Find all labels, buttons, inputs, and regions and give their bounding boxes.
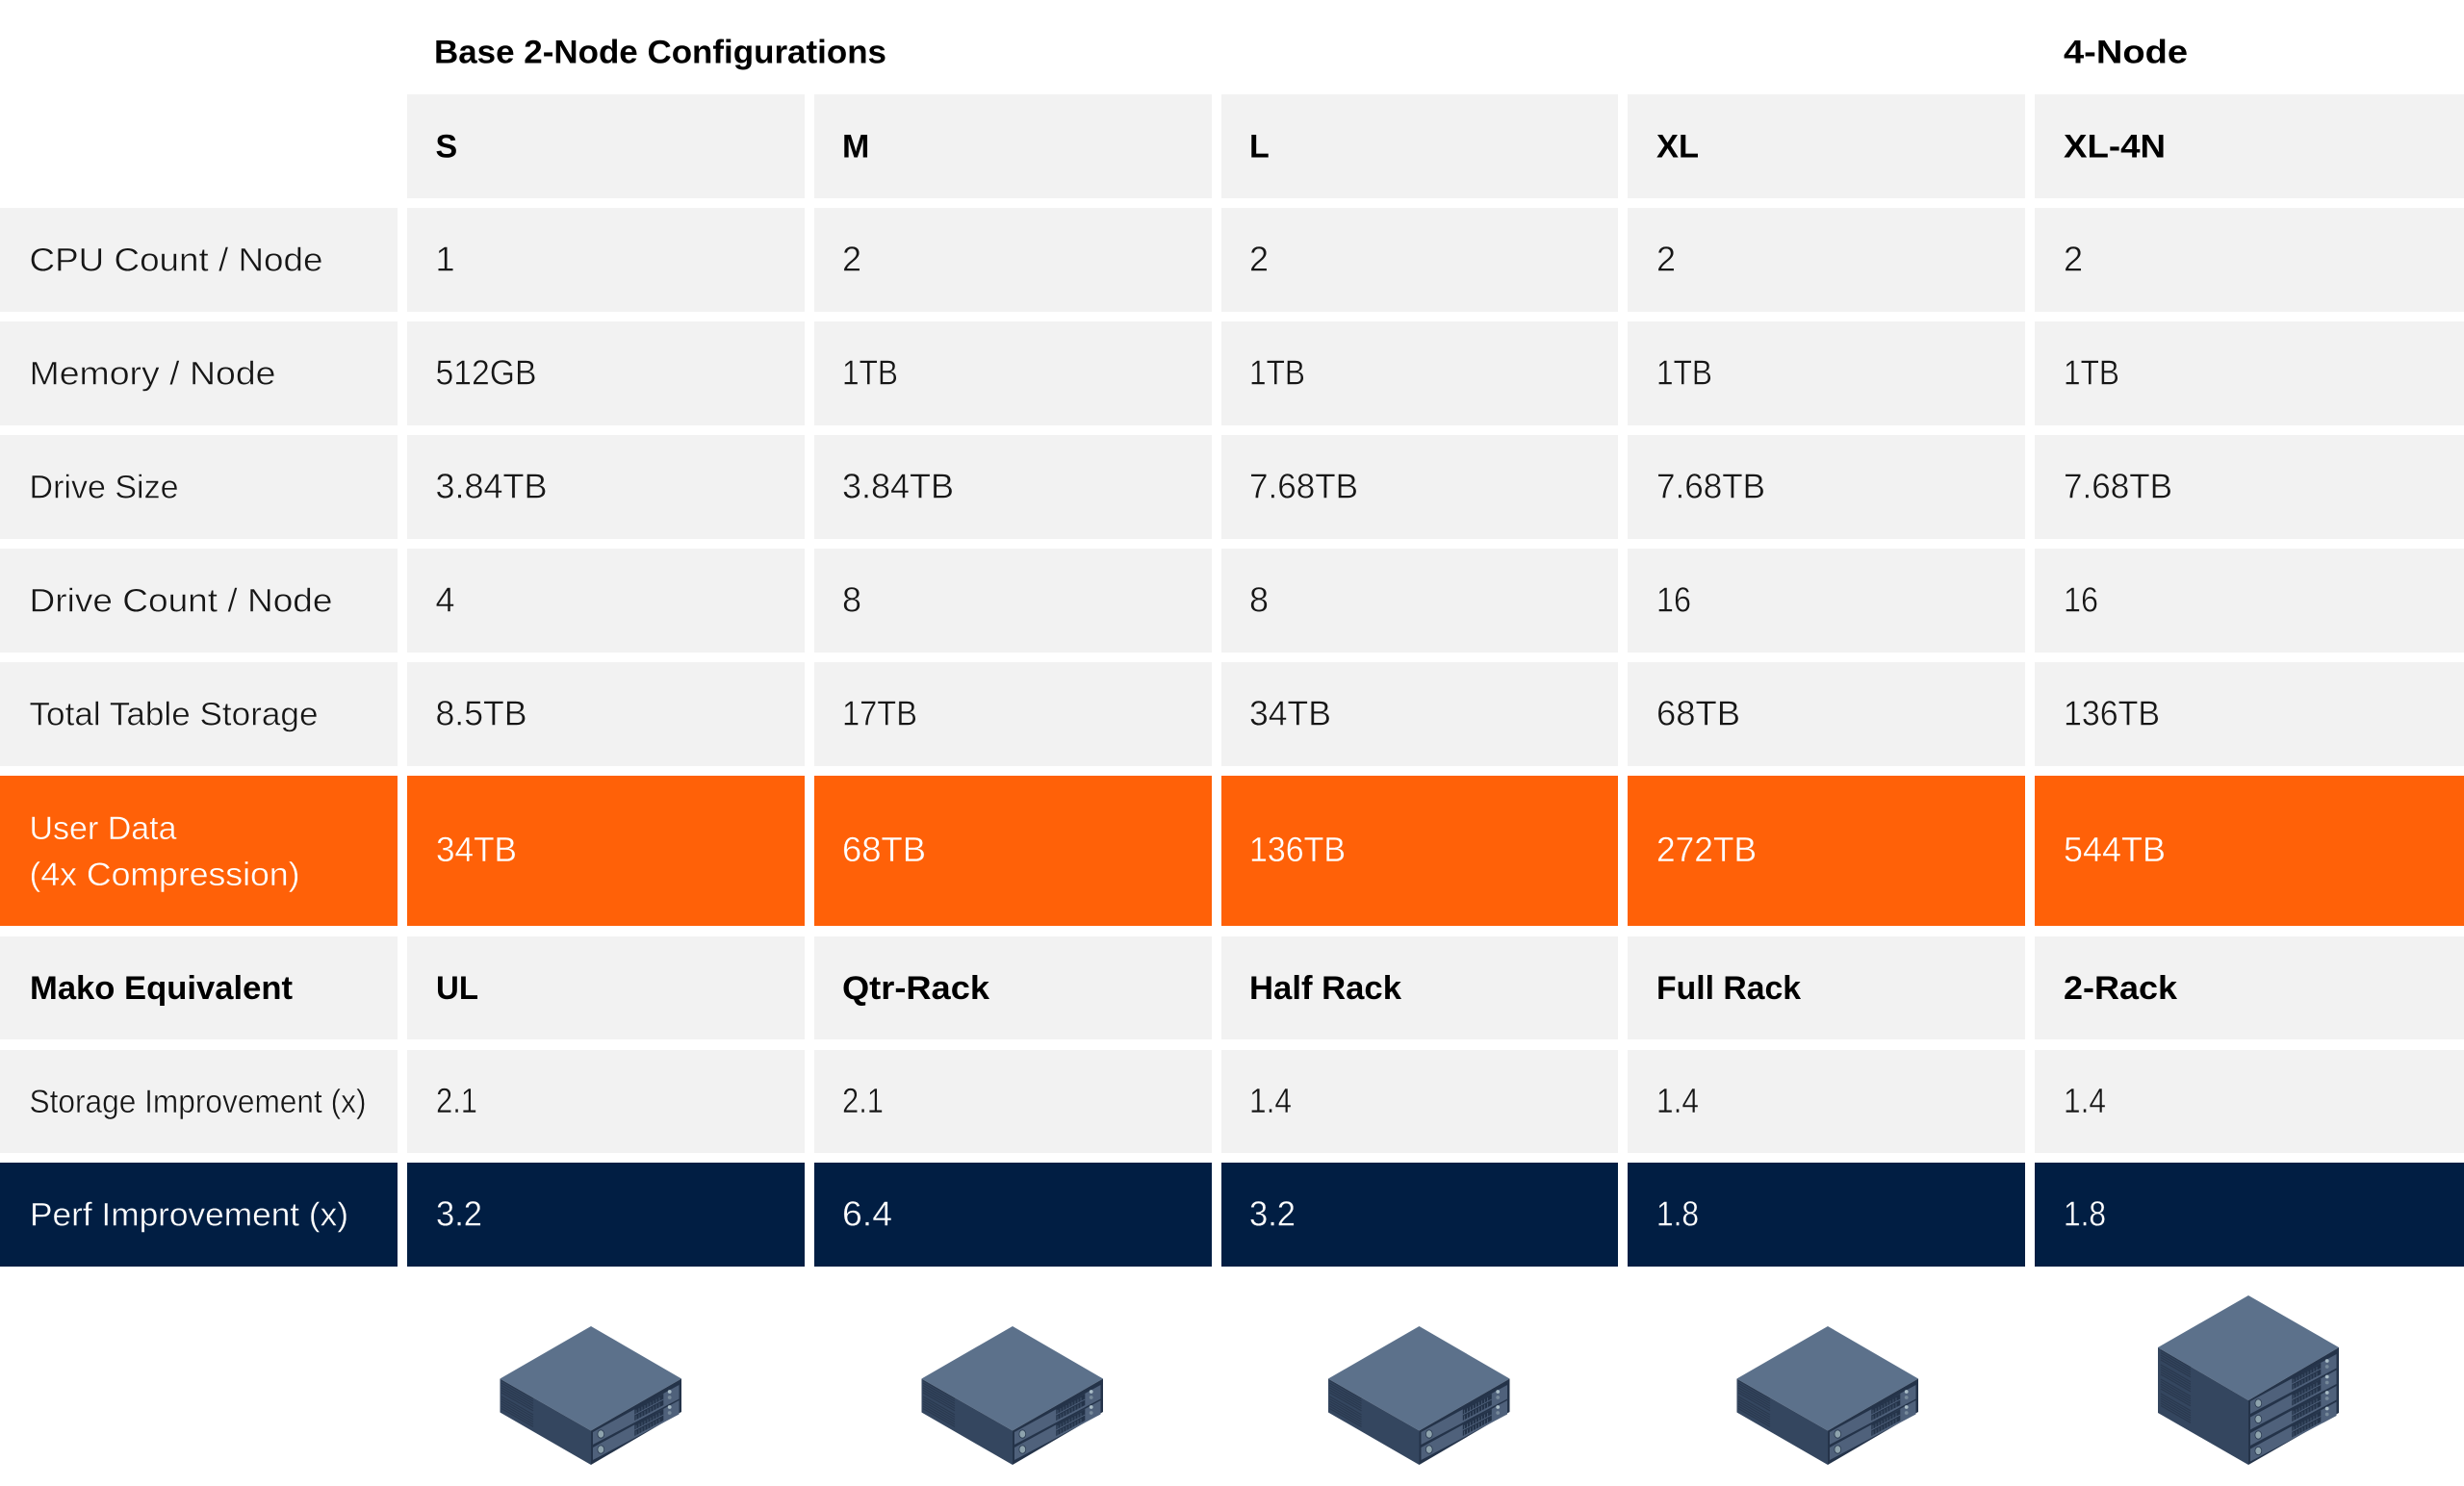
value L: 3.2 — [1249, 1193, 1296, 1234]
value XL-4N — [2035, 549, 2464, 653]
value S — [407, 321, 805, 425]
row label: (4x Compression) — [29, 857, 300, 893]
value XL — [1628, 1050, 2025, 1153]
row: Memory / Node — [0, 321, 2464, 425]
value L: 136TB — [1249, 830, 1346, 869]
value M: 2.1 — [842, 1081, 884, 1120]
row: Perf Improvement (x) (navy highlight) — [0, 1163, 2464, 1267]
row label: Memory / Node — [29, 356, 275, 393]
row label — [0, 321, 398, 425]
value XL-4N: 1.4 — [2064, 1081, 2106, 1120]
value S — [407, 936, 805, 1039]
value S: 3.2 — [436, 1193, 482, 1234]
value XL — [1628, 662, 2025, 766]
value XL-4N — [2035, 435, 2464, 539]
value XL-4N: 7.68TB — [2064, 466, 2172, 506]
row label: Drive Size — [29, 470, 179, 506]
value XL-4N — [2035, 936, 2464, 1039]
value S — [407, 1163, 805, 1267]
row label: User Data — [29, 810, 177, 847]
value XL: 1.8 — [1656, 1193, 1699, 1234]
value S: 2.1 — [436, 1081, 477, 1120]
value L — [1221, 1163, 1618, 1267]
row label — [0, 1163, 398, 1267]
value XL: 272TB — [1656, 830, 1757, 869]
icon: server L — [1328, 1326, 1509, 1465]
row label — [0, 1050, 398, 1153]
value XL-4N: 1.8 — [2064, 1193, 2106, 1234]
value M — [814, 1050, 1212, 1153]
row label: Perf Improvement (x) — [30, 1197, 348, 1234]
value M — [814, 208, 1212, 312]
value XL: 7.68TB — [1656, 466, 1765, 506]
row label — [0, 662, 398, 766]
row label — [0, 936, 398, 1039]
cell: XL-4N: XL-4N — [2064, 129, 2166, 166]
value M: 8 — [842, 579, 861, 620]
value M: 2 — [842, 239, 861, 279]
row: size headers — [407, 94, 2464, 198]
value M — [814, 321, 1212, 425]
row label — [0, 208, 398, 312]
value L: Half Rack — [1249, 970, 1401, 1007]
value M: 3.84TB — [842, 466, 954, 506]
value L: 7.68TB — [1249, 466, 1358, 506]
row label: Storage Improvement (x) — [29, 1084, 366, 1120]
cell: XL — [1628, 94, 2025, 198]
row: Storage Improvement (x) — [0, 1050, 2464, 1153]
value L — [1221, 1050, 1618, 1153]
value M — [814, 776, 1212, 926]
row: Drive Count / Node — [0, 549, 2464, 653]
row label — [0, 776, 398, 926]
value M: 1TB — [842, 352, 898, 393]
value L: 8 — [1249, 579, 1269, 620]
value XL-4N — [2035, 208, 2464, 312]
cell: M — [814, 94, 1212, 198]
value XL-4N: 544TB — [2064, 830, 2166, 869]
value L: 34TB — [1249, 693, 1331, 733]
value L — [1221, 435, 1618, 539]
value M: 68TB — [842, 830, 926, 869]
cell: XL: XL — [1656, 129, 1699, 166]
value XL-4N: 1TB — [2064, 352, 2119, 393]
value XL: Full Rack — [1656, 970, 1801, 1007]
value S — [407, 776, 805, 926]
icon: server S — [500, 1326, 681, 1465]
row label: Total Table Storage — [29, 697, 318, 733]
value L — [1221, 936, 1618, 1039]
value L — [1221, 321, 1618, 425]
value L — [1221, 208, 1618, 312]
value S: 1 — [435, 239, 455, 279]
value XL-4N — [2035, 1163, 2464, 1267]
value XL: 68TB — [1656, 693, 1740, 733]
value M — [814, 549, 1212, 653]
value S: UL — [436, 970, 478, 1007]
value XL-4N: 136TB — [2064, 693, 2160, 733]
value M: 17TB — [842, 693, 917, 733]
value M: Qtr-Rack — [842, 970, 989, 1007]
value M — [814, 1163, 1212, 1267]
heading: 4-Node: 4-Node — [2064, 35, 2188, 71]
value S — [407, 208, 805, 312]
row label — [0, 549, 398, 653]
value S: 34TB — [436, 830, 517, 869]
value XL-4N: 16 — [2064, 579, 2098, 620]
value L: 2 — [1249, 239, 1269, 279]
value M — [814, 435, 1212, 539]
value S — [407, 662, 805, 766]
value M — [814, 936, 1212, 1039]
value XL — [1628, 208, 2025, 312]
value XL-4N — [2035, 662, 2464, 766]
cell: XL-4N — [2035, 94, 2464, 198]
row: Mako Equivalent — [0, 936, 2464, 1039]
value XL — [1628, 1163, 2025, 1267]
value S — [407, 1050, 805, 1153]
cell: L — [1221, 94, 1618, 198]
value S — [407, 435, 805, 539]
row: User Data (orange highlight) — [0, 776, 2464, 926]
row label — [0, 435, 398, 539]
value M — [814, 662, 1212, 766]
cell: S: S — [435, 129, 457, 166]
value M: 6.4 — [842, 1193, 892, 1234]
value XL — [1628, 321, 2025, 425]
value XL: 1TB — [1656, 352, 1712, 393]
value S: 8.5TB — [435, 693, 527, 733]
row label: CPU Count / Node — [29, 243, 323, 279]
row label: Mako Equivalent — [30, 970, 293, 1007]
value XL: 2 — [1656, 239, 1676, 279]
value XL-4N — [2035, 321, 2464, 425]
value XL-4N — [2035, 1050, 2464, 1153]
row: CPU Count / Node — [0, 208, 2464, 312]
value XL — [1628, 435, 2025, 539]
value L — [1221, 776, 1618, 926]
value S: 3.84TB — [435, 466, 547, 506]
value S — [407, 549, 805, 653]
value XL-4N — [2035, 776, 2464, 926]
value L: 1.4 — [1249, 1081, 1292, 1120]
value XL: 1.4 — [1656, 1081, 1699, 1120]
icon: server XL — [1736, 1326, 1918, 1465]
row label: Drive Count / Node — [29, 583, 333, 620]
cell: S — [407, 94, 805, 198]
value XL — [1628, 776, 2025, 926]
icon: server M — [922, 1326, 1103, 1465]
value XL — [1628, 936, 2025, 1039]
heading: Base 2-Node Configurations: Base 2-Node Configurations — [434, 35, 886, 71]
cell: M: M — [842, 129, 869, 166]
value S: 4 — [435, 579, 455, 620]
row: Drive Size — [0, 435, 2464, 539]
value L — [1221, 549, 1618, 653]
value S: 512GB — [435, 352, 537, 393]
value XL-4N: 2 — [2064, 239, 2083, 279]
value L — [1221, 662, 1618, 766]
value XL: 16 — [1656, 579, 1691, 620]
value XL — [1628, 549, 2025, 653]
row: Total Table Storage — [0, 662, 2464, 766]
icon: server XL-4N (four units) — [2158, 1295, 2339, 1465]
value XL-4N: 2-Rack — [2064, 970, 2177, 1007]
value L: 1TB — [1249, 352, 1305, 393]
cell: L: L — [1249, 129, 1270, 166]
